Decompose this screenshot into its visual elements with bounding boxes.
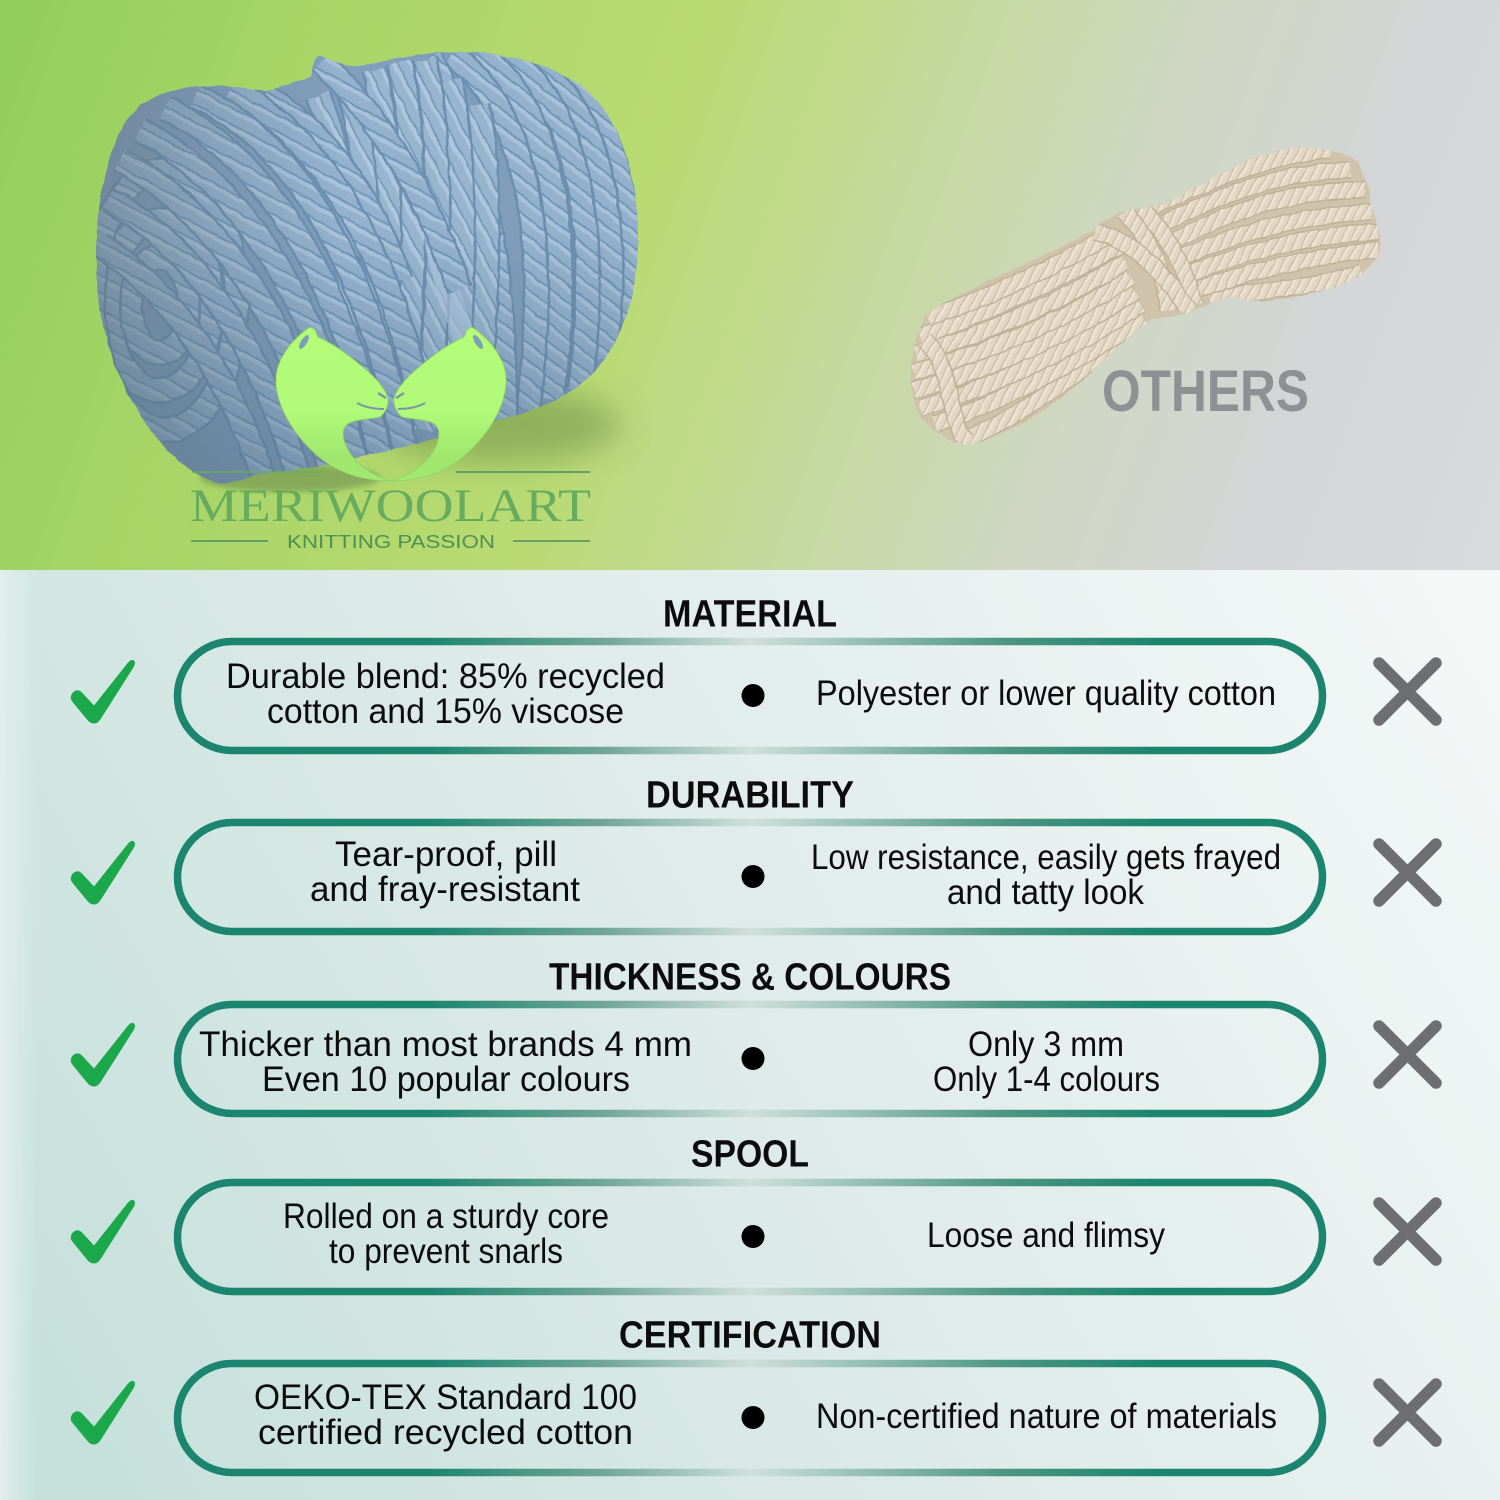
pill container [178,1004,1322,1114]
check icon [71,1381,135,1444]
brand tagline: KNITTING PASSION: KNITTING PASSION [287,532,495,552]
others text: Only 1-4 colours [933,1060,1160,1099]
our product text: and fray-resistant [310,870,580,909]
cross icon [1379,844,1436,901]
others text: Only 3 mm [968,1025,1124,1064]
our product text: Thicker than most brands 4 mm [199,1025,692,1064]
cross icon [1379,1384,1436,1441]
others text: Loose and flimsy [927,1216,1165,1255]
our product text: Tear-proof, pill [335,835,557,874]
our product text: Even 10 popular colours [262,1060,630,1099]
heading: certification: CERTIFICATION [619,1314,881,1356]
background: lower comparison table band [0,570,1500,1500]
others text: Low resistance, easily gets frayed [811,838,1281,877]
check icon [71,660,135,724]
pill container [178,1364,1322,1472]
heading: spool: SPOOL [691,1134,809,1176]
row: certification [71,1314,1436,1472]
separator dot [742,1225,764,1248]
check icon [71,841,135,904]
others text: and tatty look [947,873,1144,912]
our product text: certified recycled cotton [258,1413,633,1452]
check icon [71,1200,135,1264]
pill container [178,642,1322,750]
beige twisted rope photo [905,140,1385,450]
our product text: Rolled on a sturdy core [283,1197,609,1236]
label: OTHERS: OTHERS [1102,359,1309,424]
check icon [71,1023,135,1086]
our product text: cotton and 15% viscose [267,692,624,731]
heading: thickness and colours: THICKNESS & COLOURS [549,956,951,998]
our product text: OEKO-TEX Standard 100 [254,1378,637,1417]
brand wordmark: MERIWOOLART: MERIWOOLART [190,480,591,532]
pill container [178,1182,1322,1292]
cross icon [1379,1203,1436,1260]
blue yarn spool photo [90,45,650,500]
our product text: to prevent snarls [329,1232,563,1271]
separator dot [742,684,764,707]
row: durability [71,774,1436,932]
row: material [71,594,1436,750]
pill container [178,822,1322,932]
others text: Non-certified nature of materials [816,1397,1277,1436]
heading: material: MATERIAL [663,594,837,636]
separator dot [742,865,764,888]
brand logo: two facing cats [276,327,506,481]
heading: durability: DURABILITY [646,774,854,816]
cross icon [1379,1026,1436,1083]
row: spool [71,1134,1436,1292]
cross icon [1379,663,1436,720]
our product text: Durable blend: 85% recycled [226,657,665,696]
row: thickness and colours [71,956,1436,1114]
separator dot [742,1047,764,1070]
background: top product comparison band [0,0,1500,570]
others text: Polyester or lower quality cotton [816,674,1276,713]
separator dot [742,1406,764,1429]
